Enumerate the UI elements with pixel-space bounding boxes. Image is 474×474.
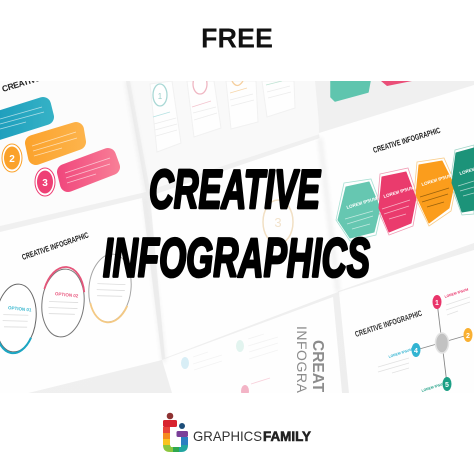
panel: top-middle slide with cards: 1 xyxy=(158,92,163,101)
panel: top-middle slide with cards xyxy=(130,74,320,190)
panel: left slide with option circles xyxy=(0,198,162,400)
logo: graphicsfamily: FAMILY xyxy=(263,428,312,444)
teal card fragment xyxy=(331,81,370,101)
panel: bottom-right slide with hub diagram xyxy=(339,250,474,393)
pink card fragment xyxy=(381,81,412,86)
faded icon: teal xyxy=(236,340,244,352)
title: creative infographics: CREATIVE xyxy=(149,158,321,220)
slide title: creative infographic: CREATIVE INFOGRAPHIC xyxy=(372,126,442,155)
panel: bottom-centre faded slide xyxy=(162,297,342,429)
node 2 xyxy=(464,328,472,342)
option circle 2: OPTION 02 xyxy=(55,291,79,299)
hexagon labels: LOREM IPSUM xyxy=(421,173,453,187)
hexagon labels xyxy=(346,166,474,210)
node 1 xyxy=(432,295,442,309)
panel: centre slide xyxy=(150,138,338,358)
number badge 3: 3 xyxy=(42,178,48,189)
node 4 xyxy=(412,343,420,357)
card text lines xyxy=(153,81,291,136)
hexagon: pink xyxy=(379,172,416,232)
faded ring xyxy=(263,200,293,244)
faded text lines xyxy=(193,334,278,384)
option circle 1 xyxy=(0,282,39,355)
panel: centre slide: 3 xyxy=(274,215,282,230)
panel: bottom-right slide with hub diagram: LOREM IPSUM xyxy=(388,347,413,359)
decorative soft shadows between slides xyxy=(127,81,338,362)
wordmark: GRAPHICS xyxy=(193,428,262,444)
hub centre xyxy=(436,333,448,353)
step rings xyxy=(153,84,167,106)
pink pill xyxy=(65,156,112,184)
number badge 3 xyxy=(35,168,55,196)
node 5: 5 xyxy=(445,382,449,389)
title: creative infographics xyxy=(103,158,370,288)
logo: graphicsfamily xyxy=(163,413,312,452)
node 4: 4 xyxy=(414,348,418,355)
heading: FREE: FREE xyxy=(201,22,273,54)
teal pill xyxy=(0,105,46,134)
panel: top-right slide fragment xyxy=(319,81,412,132)
panel: bottom-right slide with hub diagram: LOREM IPSUM xyxy=(421,381,446,393)
hexagon outlines xyxy=(336,145,474,241)
slide title: creative infographic: CREATIVE INFOGRAPHIC xyxy=(1,56,98,94)
hexagon: teal xyxy=(338,182,380,238)
node 5 xyxy=(442,377,452,391)
hexagon labels: LOREM IPSUM xyxy=(346,196,378,210)
option circle 3 xyxy=(88,254,132,324)
vertical text: creative infographic: CREATIVE xyxy=(309,340,326,417)
hexagon text lines xyxy=(345,181,474,229)
panel: right slide with hexagons xyxy=(319,85,474,292)
vertical text: creative infographic: INFOGRAPHIC xyxy=(294,326,310,429)
panel: tilted slides collage xyxy=(0,81,474,393)
slide title: creative infographic: CREATIVE INFOGRAPHIC xyxy=(354,309,423,339)
icon: family mark xyxy=(163,413,188,452)
option circle 2 xyxy=(41,266,86,338)
hexagon: green xyxy=(452,148,474,212)
faded icon: pink xyxy=(241,385,249,397)
option circle 1: OPTION 01 xyxy=(8,305,32,313)
faded icon: blue xyxy=(181,357,189,369)
node 1: 1 xyxy=(435,300,439,307)
hexagon: orange xyxy=(416,161,454,223)
pill text lines xyxy=(0,107,110,183)
node 2: 2 xyxy=(466,333,470,340)
node labels: LOREM IPSUM xyxy=(444,287,469,299)
cards xyxy=(150,81,295,152)
orange pill xyxy=(33,130,78,157)
hexagon labels: LOREM IPSUM xyxy=(383,185,415,199)
panel: top-left slide with pills xyxy=(0,81,145,226)
number badge 2 xyxy=(2,144,22,172)
slide title: creative infographic: CREATIVE INFOGRAPHIC xyxy=(21,231,90,262)
number badge 2: 2 xyxy=(9,154,15,165)
vertical text: creative infographic xyxy=(294,326,326,429)
hub connectors xyxy=(420,308,464,378)
